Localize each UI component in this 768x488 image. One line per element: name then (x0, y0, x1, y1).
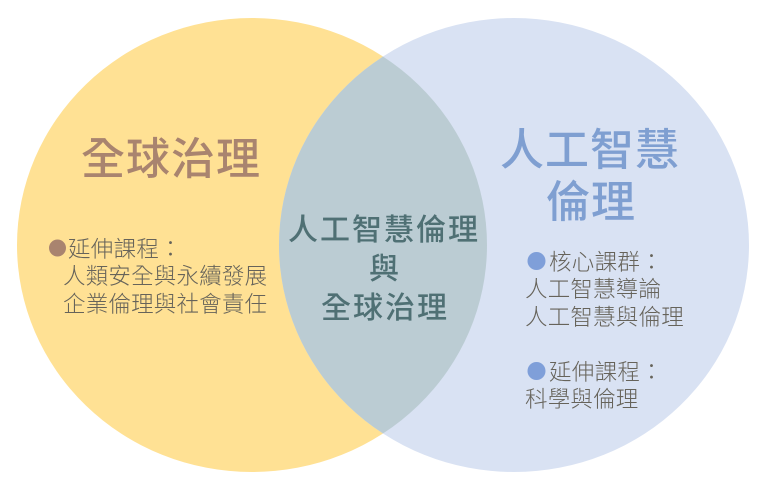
overlap line 1: 人工智慧倫理 (288, 214, 480, 247)
label: extended courses: 延伸課程： (68, 237, 182, 262)
text block: extended courses (525, 360, 663, 412)
icon: bullet brown (49, 240, 66, 256)
course: human security: 人類安全與永續發展 (63, 264, 267, 289)
heading: AI ethics (500, 126, 680, 227)
course: intro to AI: 人工智慧導論 (525, 277, 661, 302)
course: science and ethics: 科學與倫理 (525, 387, 639, 412)
overlap region (279, 56, 487, 434)
text block: global governance courses (49, 237, 267, 317)
icon: bullet blue (528, 252, 546, 270)
circle: AI ethics (279, 18, 749, 472)
heading: global governance: 全球治理 (81, 135, 261, 184)
label: extended courses: 延伸課程： (549, 360, 663, 385)
overlap line 3: 全球治理 (321, 292, 449, 325)
heading line 1: 人工智慧 (500, 126, 680, 175)
icon: bullet blue (528, 362, 546, 380)
text block: core courses (525, 250, 684, 330)
label: core group: 核心課群： (549, 250, 663, 275)
course: AI and ethics: 人工智慧與倫理 (525, 305, 684, 330)
text block: overlap (288, 214, 480, 325)
overlap line 2: 與 (369, 253, 399, 286)
circle: global governance (17, 18, 487, 472)
heading line 2: 倫理 (546, 178, 636, 227)
course: business ethics: 企業倫理與社會責任 (63, 292, 267, 317)
